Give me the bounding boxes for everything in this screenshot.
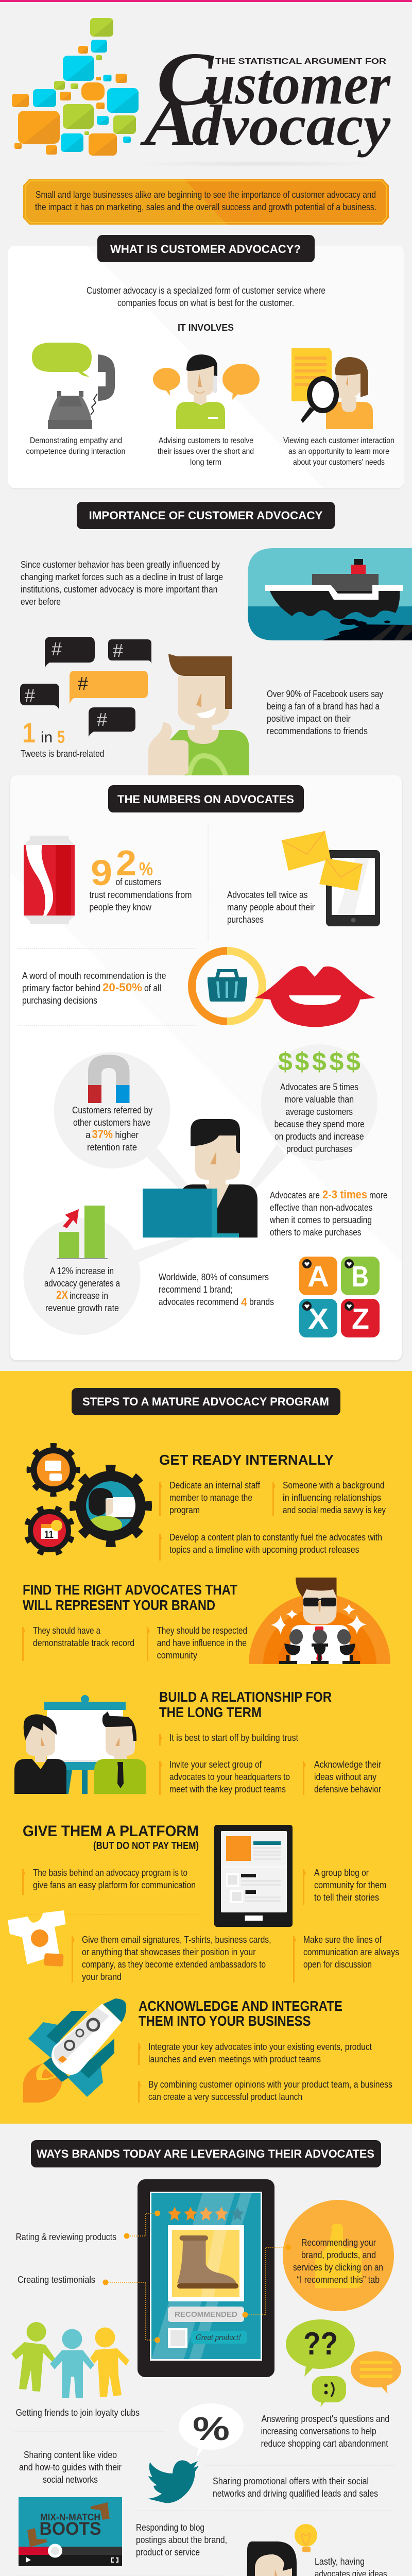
bullet: group blog: to tell their stories — [314, 1892, 379, 1903]
bullet: lines of communication: open for discussion — [303, 1959, 372, 1970]
title: C — [157, 37, 215, 122]
callout: recommending your brand: Recommending your — [301, 2238, 376, 2248]
callout: recommending your brand — [283, 2200, 394, 2311]
text: importance paragraph — [21, 560, 223, 607]
top pink bar — [0, 0, 412, 2]
step heading: give them a platform: (BUT DO NOT PAY THEM) — [93, 1840, 199, 1852]
bullet: acknowledge ideas — [303, 1759, 381, 1795]
step heading: build a relationship — [159, 1689, 332, 1720]
caption: advising — [158, 436, 254, 467]
bullet: acknowledge ideas: defensive behavior — [314, 1784, 381, 1794]
heading: steps: STEPS TO A MATURE ADVOCACY PROGRAM — [82, 1395, 329, 1408]
text: facebook stat: being a fan of a brand has had a — [267, 701, 380, 711]
caption: advising: Advising customers to resolve — [159, 436, 253, 445]
step heading: build a relationship: BUILD A RELATIONSHIP FOR — [159, 1689, 332, 1705]
boot photo — [168, 2225, 244, 2301]
text: advocates tell twice — [227, 890, 315, 925]
bullet: basis — [22, 1868, 196, 1895]
callout: 12 percent increase: revenue growth rate — [45, 1303, 119, 1313]
text: responding to blog postings: product or service — [136, 2547, 200, 2557]
stat: 92 percent: of customers — [115, 877, 161, 887]
text: sharing content — [19, 2450, 122, 2485]
bullet: invite select group: advocates to your headquarters to — [169, 1772, 290, 1782]
bullet: respected — [147, 1625, 247, 1661]
icon: percent bubble: % — [193, 2410, 230, 2447]
text: facebook stat: positive impact on their — [267, 714, 351, 724]
icon: shopping basket ring — [188, 947, 266, 1025]
icon: dollar signs: $ — [346, 1047, 360, 1076]
icon: sinking ship in oil slick — [248, 548, 412, 640]
text: answering questions: Answering prospect's questions and — [262, 2414, 389, 2424]
text: importance paragraph: ever before — [21, 597, 61, 607]
icon: brand tiles A B X Z: X — [308, 1302, 329, 1335]
text: sharing content: Sharing content like video — [24, 2450, 117, 2460]
callout: 12 percent increase: A 12% increase in — [50, 1266, 114, 1276]
step heading: give them a platform: GIVE THEM A PLATFORM — [23, 1823, 199, 1840]
stat: 92 percent — [90, 843, 192, 912]
text: sharing promotional offers: networks and driving qualified leads and sales — [213, 2488, 378, 2499]
step heading: find the right advocates: FIND THE RIGHT ADVOCATES THAT — [23, 1582, 237, 1598]
bullet: group blog: community for them — [314, 1880, 386, 1890]
icon: video player: MIX-N-MATCH — [40, 2512, 100, 2522]
heading: importance of customer advocacy: IMPORTANCE OF CUSTOMER ADVOCACY — [89, 509, 323, 522]
bullet: give them email signatures: or anything that showcases their position in your — [82, 1947, 256, 1957]
bullet: dedicate staff: member to manage the — [169, 1493, 252, 1503]
stat: 92 percent: people they know — [90, 902, 152, 912]
callout: advocates 5 times more valuable: average customers — [286, 1107, 353, 1117]
bullet: give them email signatures: Give them email signatures, T-shirts, business cards, — [82, 1935, 271, 1945]
bullet: integrate: Integrate your key advocates into your existing events, product — [148, 2042, 372, 2052]
callout: advocates 5 times more valuable — [248, 1044, 377, 1189]
icon: brand tiles A B X Z: A — [307, 1260, 329, 1293]
heading: ways brands leverage advocates: WAYS BRANDS TODAY ARE LEVERAGING THEIR ADVOCATES — [37, 2147, 374, 2160]
text: advocates tell twice: many people about their — [227, 902, 315, 912]
icon: hashtag speech bubbles: # — [97, 709, 107, 730]
text: importance paragraph: Since customer behavior has been greatly influenced by — [21, 560, 220, 570]
bullet: track record: They should have a — [33, 1625, 101, 1636]
text: facebook stat: recommendations to friends — [267, 726, 368, 736]
text: definition: Customer advocacy is a specialized form of customer service where — [87, 285, 325, 296]
icon: dollar signs: $ — [330, 1047, 344, 1076]
icon: man with laptop — [143, 1119, 258, 1238]
icon: brand tiles A B X Z: B — [352, 1260, 369, 1293]
text: worldwide: Worldwide, 80% of consumers — [159, 1272, 269, 1282]
bullet: respected: community — [157, 1650, 197, 1660]
bullet: invite select group: Invite your select group of — [169, 1759, 262, 1770]
caption: advising: long term — [190, 458, 221, 467]
bullet: dedicate staff: program — [169, 1505, 200, 1515]
bullet: integrate: launches and even meetings with product teams — [148, 2054, 321, 2064]
icon: phone with community page — [214, 1825, 293, 1927]
subheading: it involves: IT INVOLVES — [178, 323, 234, 333]
caption: viewing: as an opportunity to learn more — [288, 447, 389, 456]
bullet: invite select group: meet with the key product teams — [169, 1784, 286, 1794]
callout: customers referred: retention rate — [87, 1142, 137, 1153]
bullet: someone with a background: in influencing relationships — [283, 1493, 381, 1503]
icon: three friends holding hands — [11, 2322, 129, 2398]
callout: customers referred: higher — [115, 1130, 139, 1140]
caption: empathy — [26, 436, 126, 456]
icon: celebrity at microphones — [249, 1578, 390, 1664]
bullet: content plan: topics and a timeline with upcoming product releases — [169, 1545, 359, 1555]
bullet: building trust: It is best to start off by building trust — [169, 1733, 298, 1743]
bullet: invite select group — [159, 1759, 290, 1795]
bullet: basis: The basis behind an advocacy program is to — [33, 1868, 187, 1878]
bullet: group blog: A group blog or — [314, 1868, 369, 1878]
stat: 1 in 5 tweets: in — [41, 729, 53, 746]
icon: red lips — [255, 966, 375, 1027]
title: dvocacy — [192, 94, 391, 158]
icon: support agent with speech bubbles — [153, 354, 260, 429]
review comment — [168, 2328, 247, 2348]
icon: soda can — [24, 836, 75, 924]
connector: recommend callout — [242, 2244, 291, 2317]
connector: testimonial callout — [103, 2279, 160, 2343]
icon: hashtag speech bubbles — [20, 637, 151, 737]
icon: video player: BOOTS — [39, 2519, 101, 2539]
heading: the numbers on advocates: THE NUMBERS ON ADVOCATES — [117, 793, 294, 806]
icon: hashtag speech bubbles: # — [113, 640, 123, 661]
bullet: dedicate staff: Dedicate an internal staff — [169, 1480, 261, 1490]
icon: hashtag speech bubbles: # — [52, 638, 62, 659]
text: worldwide: advocates recommend — [159, 1297, 238, 1307]
bullet: respected: They should be respected — [157, 1625, 247, 1636]
callout: advocates 5 times more valuable: Advocates are 5 times — [280, 1082, 358, 1092]
icon: video player — [19, 2497, 122, 2566]
text: word of mouth — [22, 971, 166, 1006]
text: answering questions: increasing conversations to help — [261, 2426, 376, 2436]
heading: the numbers on advocates — [108, 785, 304, 812]
bullet: respected: and have influence in the — [157, 1638, 247, 1648]
callout: recommending your brand: “I recommend this” tab — [297, 2275, 380, 2285]
callout: 12 percent increase: increase in — [70, 1291, 108, 1301]
callout: intro banner — [23, 179, 389, 225]
callout: advocates 5 times more valuable: more valuable than — [284, 1094, 354, 1105]
text: lastly: Lastly, having — [315, 2556, 365, 2567]
text: answering questions: reduce shopping cart abandonment — [261, 2438, 388, 2449]
callout: customers referred: a — [85, 1130, 91, 1140]
bullet: someone with a background: and social media savvy is key — [283, 1505, 386, 1515]
text: word of mouth: of all — [144, 983, 161, 993]
chart: rising bars with arrow — [57, 1206, 108, 1259]
bullet: acknowledge ideas: ideas without any — [314, 1772, 376, 1782]
caption: viewing: about your customers' needs — [293, 458, 385, 467]
bullet: combining opinions: can create a very successful product launch — [148, 2092, 302, 2102]
icon: man giving a thumbs up — [148, 654, 249, 775]
stat: 92 percent: 9 — [91, 853, 112, 893]
heading: ways brands leverage advocates — [31, 2140, 381, 2167]
text: advocates tell twice: purchases — [227, 914, 264, 925]
callout: customers referred — [54, 1052, 188, 1189]
bullet: lines of communication: communication are always — [303, 1947, 399, 1957]
icon: tablet with envelopes — [282, 831, 380, 926]
heading: what is customer advocacy: WHAT IS CUSTOMER ADVOCACY? — [110, 243, 301, 256]
step heading: find the right advocates: WILL REPRESENT YOUR BRAND — [23, 1597, 215, 1613]
callout: advocates 5 times more valuable: because they spend more — [274, 1119, 365, 1129]
callout: customers referred: Customers referred by — [72, 1105, 152, 1115]
text: word of mouth: A word of mouth recommendation is the — [22, 971, 166, 981]
callout: customers referred: 37% — [92, 1128, 113, 1141]
callout: 12 percent increase: 2X — [56, 1289, 68, 1301]
text: advocates 2-3 times: more — [369, 1190, 387, 1200]
callout: 12 percent increase: advocacy generates a — [44, 1278, 121, 1289]
text: word of mouth: primary factor behind — [22, 983, 100, 993]
bullet: track record: demonstratable track record — [33, 1638, 134, 1648]
caption: viewing: Viewing each customer interaction — [283, 436, 394, 445]
caption: empathy: competence during interaction — [26, 447, 126, 456]
text: advocates 2-3 times: Advocates are — [270, 1190, 320, 1200]
text: advocates 2-3 times: effective than non-advocates — [270, 1202, 373, 1213]
bullet: give them email signatures: company, as they become extended ambassadors to — [82, 1959, 266, 1970]
bullet: dedicate staff — [159, 1480, 261, 1516]
text: sharing promotional offers: Sharing promotional offers with their social — [213, 2476, 369, 2486]
callout: recommending your brand: brand, products, and — [301, 2250, 376, 2260]
text: answering questions — [261, 2414, 389, 2449]
step heading: find the right advocates — [23, 1582, 237, 1613]
text: worldwide: brands — [249, 1297, 274, 1307]
step heading: build a relationship: THE LONG TERM — [159, 1704, 262, 1720]
callout: recommending your brand: services by clicking on an — [293, 2262, 383, 2273]
bullet: content plan — [159, 1532, 382, 1561]
icon: hashtag speech bubbles: # — [25, 685, 35, 706]
bullet: acknowledge ideas: Acknowledge their — [314, 1759, 381, 1770]
icon: twitter bird — [148, 2460, 199, 2503]
bullet: track record — [22, 1625, 134, 1661]
text: importance paragraph: institutions, customer advocacy is more important than — [21, 584, 217, 595]
text: advocates tell twice: Advocates tell twice as — [227, 890, 308, 900]
stat: 92 percent: 2 — [116, 843, 136, 883]
text: definition — [87, 285, 325, 308]
step heading: acknowledge and integrate: THEM INTO YOUR BUSINESS — [139, 2013, 311, 2029]
text: word of mouth: 20-50% — [102, 981, 142, 994]
icon: percent bubble — [179, 2403, 244, 2456]
icon: phone showing product review — [138, 2179, 274, 2377]
recommended button — [168, 2307, 244, 2322]
stat: 1 in 5 tweets: Tweets is brand-related — [21, 749, 104, 759]
stat: 92 percent: % — [139, 858, 153, 879]
title: A — [140, 84, 197, 160]
caption: viewing — [283, 436, 394, 467]
title — [131, 37, 391, 167]
panel: steps to a mature advocacy program — [0, 1371, 412, 2124]
bullet: combining opinions — [138, 2079, 392, 2103]
stars rating — [168, 2207, 244, 2221]
icon: woman reviewing a document with magnifier — [291, 348, 373, 429]
icon: brand tiles A B X Z: Z — [352, 1302, 369, 1335]
bullet: content plan: Develop a content plan to constantly fuel the advocates with — [169, 1532, 382, 1543]
heading: importance of customer advocacy — [77, 502, 335, 529]
bullet: someone with a background — [272, 1480, 386, 1516]
icon: dollar signs: $ — [278, 1047, 293, 1076]
icon: brand tiles A B X Z — [299, 1257, 380, 1337]
bullet: someone with a background: Someone with a background — [283, 1480, 384, 1490]
icon: dollar signs: $ — [312, 1047, 327, 1076]
icon: dollar signs: $ — [295, 1047, 309, 1076]
callout: 12 percent increase — [24, 1206, 196, 1335]
text: rating and reviewing: Rating & reviewing products — [16, 2232, 116, 2242]
bullet: give them email signatures: your brand — [82, 1972, 122, 1982]
stat: 1 in 5 tweets: 5 — [57, 727, 65, 747]
bullet: lines of communication — [293, 1935, 399, 1982]
icon: gears — [19, 1446, 148, 1561]
text: sharing promotional offers — [213, 2476, 378, 2499]
text: worldwide — [159, 1272, 274, 1309]
icon: hashtag speech bubbles: # — [78, 673, 88, 694]
text: advocates 2-3 times: when it comes to persuading — [269, 1215, 372, 1225]
icon: telephone with speech bubble — [32, 343, 115, 429]
icon: thumbs-up made of speech bubbles — [12, 18, 139, 156]
bullet: give them email signatures — [72, 1935, 271, 1982]
icon: question, chat and smile bubbles: ?? — [303, 2326, 338, 2362]
icon: rocket — [23, 1998, 126, 2103]
stat: 1 in 5 tweets — [21, 718, 104, 759]
panel: what is customer advocacy — [8, 235, 404, 489]
title: ustomer — [204, 53, 391, 116]
bullet: integrate — [138, 2042, 372, 2065]
connector: rating callout — [124, 2210, 160, 2239]
text: facebook stat: Over 90% of Facebook users say — [267, 689, 383, 699]
text: creating testimonials: Creating testimonials — [18, 2275, 95, 2285]
title: THE STATISTICAL ARGUMENT FOR — [215, 57, 387, 66]
bullet: basis: give fans an easy platform for communication — [33, 1880, 196, 1890]
text: lastly — [315, 2556, 391, 2576]
text: sharing content: and how-to guides with their — [19, 2462, 122, 2472]
icon: magnet — [88, 1055, 130, 1103]
step heading: acknowledge and integrate: ACKNOWLEDGE AND INTEGRATE — [139, 1998, 342, 2014]
text: advocates 2-3 times: 2-3 times — [322, 1188, 367, 1201]
heading: what is customer advocacy — [97, 235, 315, 262]
icon: t-shirt and badge — [8, 1910, 66, 1967]
text: loyalty clubs: Getting friends to join loyalty clubs — [16, 2408, 140, 2418]
text: advocates 2-3 times: others to make purchases — [270, 1227, 362, 1238]
text: responding to blog postings: Responding to blog — [136, 2522, 204, 2533]
bullet: building trust — [159, 1733, 298, 1745]
callout: customers referred: other customers have — [73, 1117, 150, 1128]
stat: 92 percent: trust recommendations from — [90, 890, 192, 900]
text: definition: companies focus on what is best for the customer. — [117, 298, 294, 308]
recommended button: RECOMMENDED — [175, 2310, 237, 2319]
caption: empathy: Demonstrating empathy and — [30, 436, 122, 445]
icon: question, chat and smile bubbles — [286, 2319, 401, 2407]
text: facebook stat — [267, 689, 383, 736]
caption: advising: their issues over the short and — [158, 447, 254, 456]
text: sharing content: social networks — [43, 2475, 98, 2485]
icon: meeting at flipchart — [14, 1695, 146, 1794]
text: importance paragraph: changing market forces such as a decline in trust of large — [21, 572, 223, 582]
step heading: acknowledge and integrate — [139, 1998, 342, 2029]
panel: the numbers on advocates — [9, 775, 403, 1362]
heading: steps — [72, 1388, 340, 1415]
bullet: lines of communication: Make sure the lines of — [303, 1935, 382, 1945]
stat: 1 in 5 tweets: 1 — [22, 718, 36, 749]
icon: dollar signs — [278, 1047, 360, 1076]
text: worldwide: 4 — [241, 1296, 248, 1309]
review comment: Great product! — [196, 2332, 241, 2342]
step heading: get ready internally: GET READY INTERNALLY — [159, 1452, 334, 1468]
callout: advocates 5 times more valuable: product purchases — [286, 1144, 352, 1154]
text: worldwide: recommend 1 brand; — [159, 1284, 233, 1295]
text: advocates 2-3 times — [269, 1188, 387, 1238]
text: responding to blog postings: postings about the brand, — [136, 2535, 227, 2545]
step heading: give them a platform — [23, 1823, 199, 1852]
icon: gears: 11 — [44, 1529, 54, 1540]
bullet: group blog — [303, 1868, 386, 1905]
callout: advocates 5 times more valuable: on products and increase — [274, 1131, 364, 1142]
text: responding to blog postings — [136, 2522, 227, 2557]
icon: woman with idea bulb — [242, 2524, 317, 2576]
text: word of mouth: purchasing decisions — [22, 995, 97, 1006]
